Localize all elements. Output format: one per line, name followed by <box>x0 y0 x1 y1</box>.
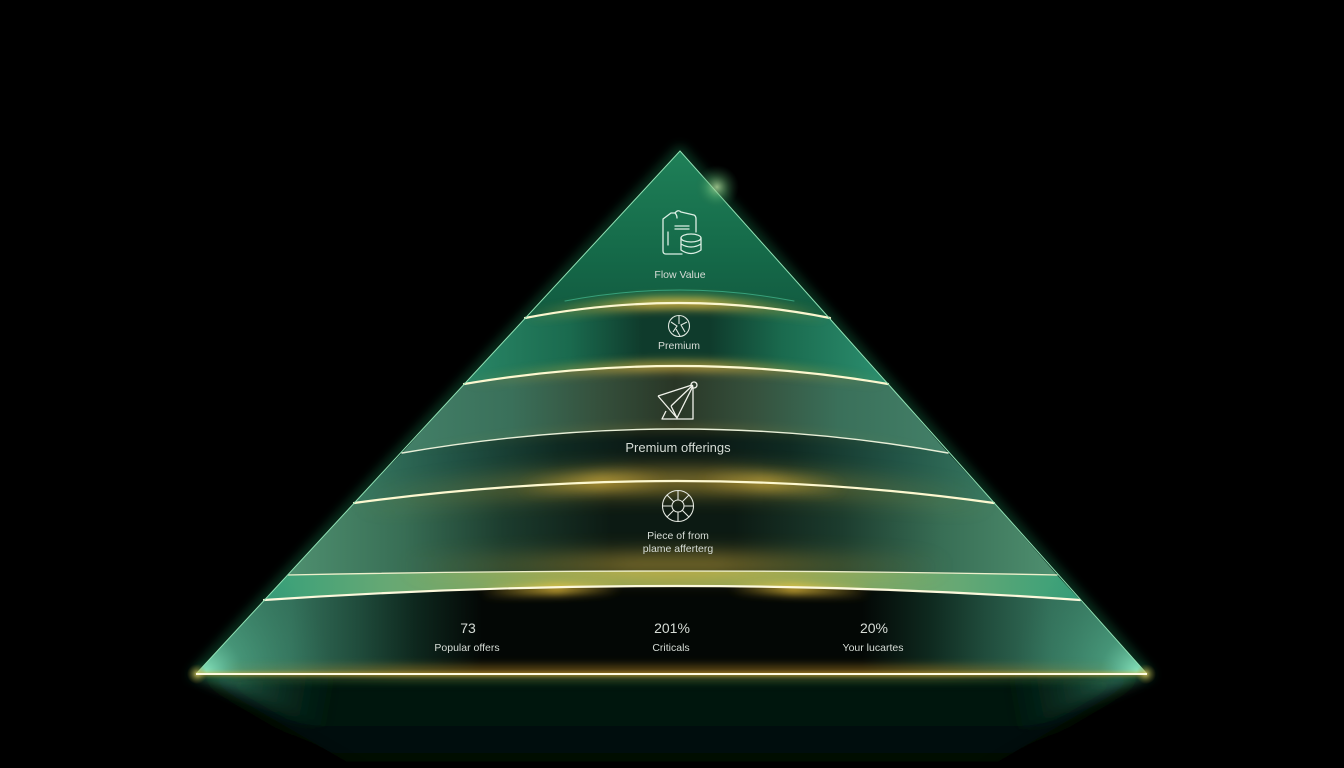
stat: your lucartes: 20% <box>860 620 888 636</box>
stat: criticals: 201% <box>654 620 690 636</box>
tier 3 fill <box>402 366 948 453</box>
tier 1 fill: top triangle <box>525 151 830 318</box>
label: tier 5: plame afferterg <box>643 543 713 555</box>
pyramid edges <box>196 151 1147 674</box>
stat: your lucartes <box>843 620 903 654</box>
floor reflection below pyramid <box>196 674 1147 768</box>
pyramid <box>196 150 1148 674</box>
golden glows <box>198 290 1145 673</box>
stat: popular offers: Popular offers <box>434 642 500 654</box>
divider curves <box>264 290 1080 600</box>
stat: criticals: Criticals <box>652 642 690 654</box>
pyramid outer glow <box>196 151 1147 674</box>
stat: popular offers: 73 <box>460 620 476 636</box>
icon: check with triangle <box>658 382 697 419</box>
sparkle on right edge <box>695 165 739 209</box>
stat: your lucartes: Your lucartes <box>843 642 903 654</box>
stat: popular offers <box>434 620 500 654</box>
tier 7 fill <box>196 586 1147 674</box>
stat: criticals <box>652 620 690 654</box>
tier 4 fill <box>354 429 994 503</box>
base line <box>187 664 1156 684</box>
icon: globe circuit <box>668 316 690 336</box>
label: tier 5: Piece of from <box>647 530 709 542</box>
icon: wheel globe <box>662 490 694 522</box>
icon: document with database <box>663 211 701 254</box>
label: tier 3: Premium offerings <box>625 440 731 455</box>
label: tier 1: Flow Value <box>654 269 706 281</box>
tier 6 fill <box>264 571 1080 600</box>
label: tier 2: Premium <box>658 340 700 352</box>
label: tier 5 <box>643 530 713 555</box>
tier 2 fill <box>464 303 888 384</box>
tier 5 fill <box>288 481 1057 575</box>
